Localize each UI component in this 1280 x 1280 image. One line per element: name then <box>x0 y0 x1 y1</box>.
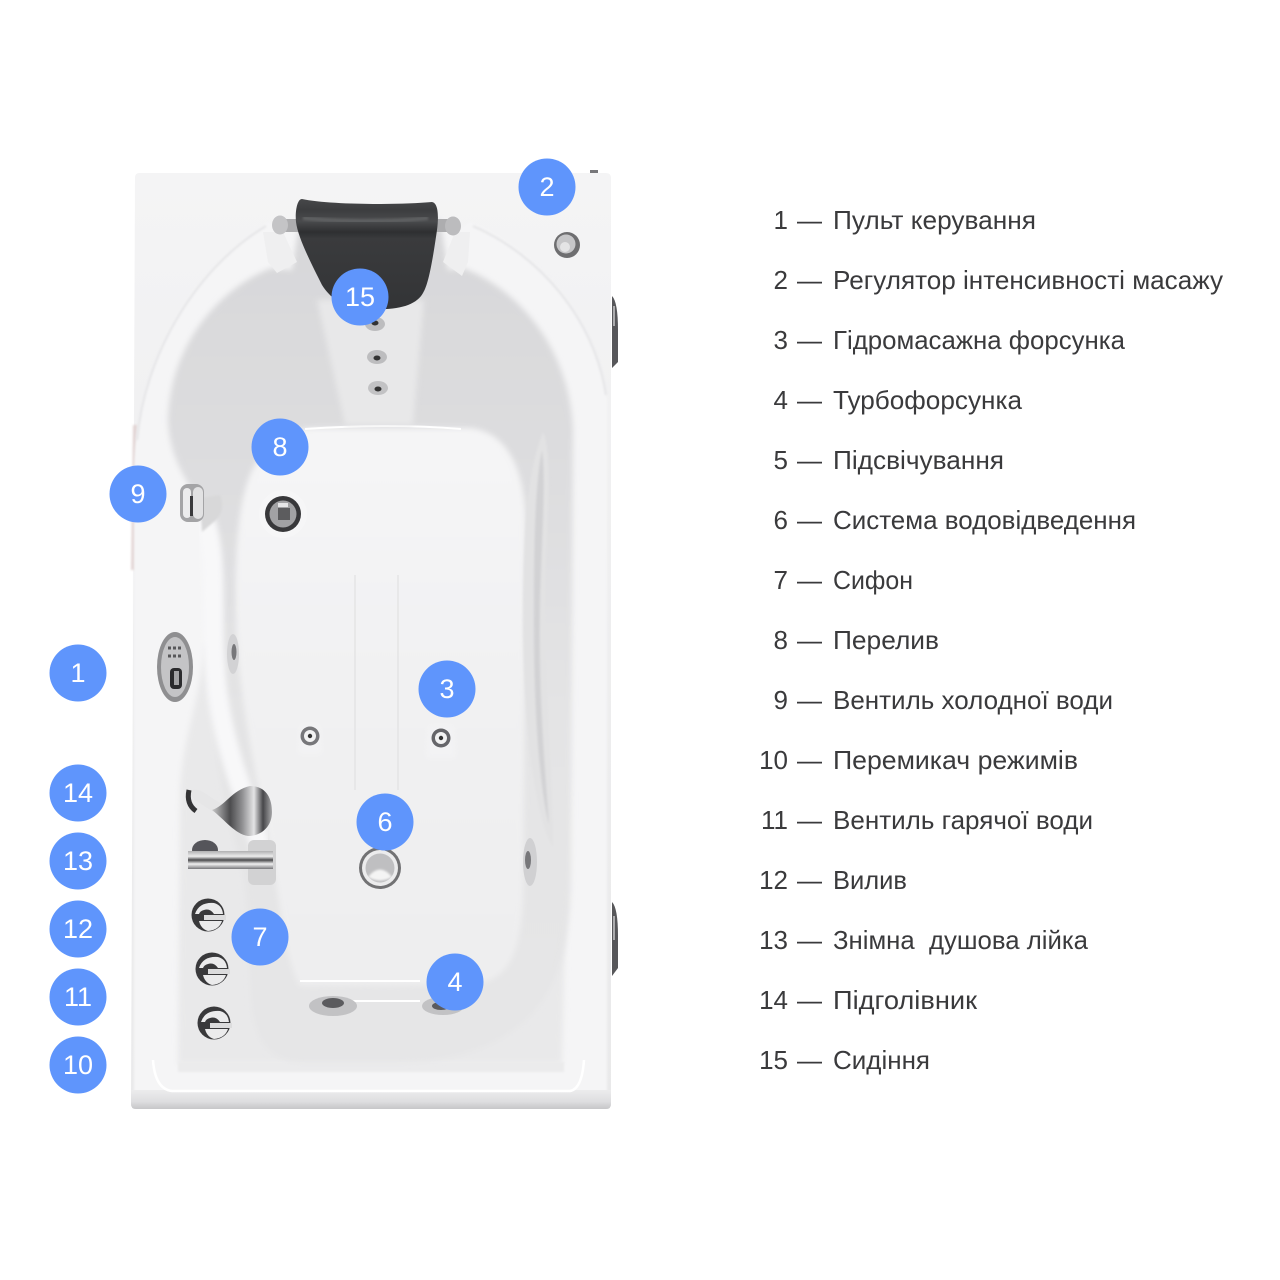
marker 15: 15 <box>345 282 375 312</box>
marker 14: 14 <box>63 778 93 808</box>
legend item 14: — <box>797 985 822 1015</box>
legend item 7: 7 <box>774 565 788 595</box>
legend <box>759 205 1223 1075</box>
upper right regulator <box>554 232 580 258</box>
headrest supports <box>263 232 470 276</box>
legend item 14 <box>759 985 978 1015</box>
legend item 15: Сидіння <box>833 1045 930 1075</box>
legend item 14: Підголівник <box>833 985 978 1015</box>
legend item 13: 13 <box>759 925 788 955</box>
legend item 4: 4 <box>774 385 788 415</box>
marker 11 <box>50 968 106 1026</box>
number markers <box>50 158 576 1094</box>
legend item 1: 1 <box>774 205 788 235</box>
legend item 8 <box>774 625 939 655</box>
control panel <box>157 632 193 702</box>
backrest panel <box>317 300 424 425</box>
tub body <box>131 173 611 1109</box>
valve knobs <box>192 898 232 1040</box>
headrest right bolt <box>445 216 461 236</box>
legend item 2: — <box>797 265 822 295</box>
legend item 11: Вентиль гарячої води <box>833 805 1093 835</box>
basin <box>168 220 573 1062</box>
legend item 9: 9 <box>774 685 788 715</box>
marker 1 <box>50 644 106 702</box>
legend item 12: 12 <box>759 865 788 895</box>
legend item 4: — <box>797 385 822 415</box>
legend item 15: — <box>797 1045 822 1075</box>
marker 2: 2 <box>539 172 555 202</box>
marker 1: 1 <box>70 658 86 688</box>
marker 8 <box>252 418 308 476</box>
marker 10: 10 <box>63 1050 93 1080</box>
legend item 1: — <box>797 205 822 235</box>
legend item 6: Система водовідведення <box>833 505 1136 535</box>
right side jet <box>523 838 537 886</box>
marker 9: 9 <box>130 479 146 509</box>
marker 7: 7 <box>252 922 268 952</box>
marker 13: 13 <box>63 846 93 876</box>
legend item 11: — <box>797 805 822 835</box>
marker 15 <box>332 268 388 326</box>
legend item 3: 3 <box>774 325 788 355</box>
legend item 10: Перемикач режимів <box>833 745 1078 775</box>
drain <box>359 847 401 889</box>
marker 3 <box>418 660 476 718</box>
basin floor <box>236 428 526 986</box>
shower head and hose <box>188 786 272 836</box>
legend item 14: 14 <box>759 985 788 1015</box>
lower basin ledge <box>178 1062 564 1072</box>
legend item 8: Перелив <box>833 625 939 655</box>
right armrest groove <box>523 432 553 847</box>
right armrest inner <box>534 450 549 825</box>
legend item 15: 15 <box>759 1045 788 1075</box>
marker 7 <box>232 908 288 966</box>
seat jets <box>298 724 456 758</box>
outer top fitting <box>590 170 598 173</box>
marker 12 <box>50 900 106 958</box>
marker 6: 6 <box>377 807 393 837</box>
bathtub top view <box>131 170 618 1109</box>
legend item 9: Вентиль холодної води <box>833 685 1113 715</box>
bottom rim <box>131 1090 611 1109</box>
legend item 11: 11 <box>761 805 788 835</box>
legend item 7: Сифон <box>833 565 913 595</box>
legend item 2: Регулятор інтенсивності масажу <box>833 265 1223 295</box>
legend item 1: Пульт керування <box>833 205 1036 235</box>
marker 12: 12 <box>63 914 93 944</box>
spout <box>188 840 276 885</box>
left side jet <box>227 634 239 674</box>
legend item 5: 5 <box>774 445 788 475</box>
marker 4 <box>426 954 484 1010</box>
faucet deck <box>178 640 566 1064</box>
legend item 10: 10 <box>759 745 788 775</box>
glossy rim band <box>134 222 607 1092</box>
legend item 7 <box>774 565 913 595</box>
marker 2 <box>518 158 576 216</box>
legend item 8: 8 <box>774 625 788 655</box>
back jets <box>365 317 388 395</box>
legend item 6: — <box>797 505 822 535</box>
legend item 12: Вилив <box>833 865 907 895</box>
rim highlights <box>153 1060 584 1091</box>
legend item 12: — <box>797 865 822 895</box>
outer right fittings <box>612 296 618 976</box>
legend item 5: Підсвічування <box>833 445 1004 475</box>
overflow <box>259 490 307 538</box>
legend item 8: — <box>797 625 822 655</box>
marker 8: 8 <box>272 432 288 462</box>
floor highlight lines <box>300 426 461 1001</box>
legend item 2: 2 <box>774 265 788 295</box>
marker 10 <box>50 1036 106 1094</box>
legend item 12 <box>759 865 907 895</box>
legend item 4: Турбофорсунка <box>833 385 1023 415</box>
legend item 13: — <box>797 925 822 955</box>
left edge tint <box>131 425 138 570</box>
marker 11: 11 <box>64 982 92 1012</box>
legend item 10: — <box>797 745 822 775</box>
left ledge curve <box>205 520 262 850</box>
legend item 3: — <box>797 325 822 355</box>
marker 9 <box>110 466 166 522</box>
marker 3: 3 <box>439 674 455 704</box>
headrest <box>296 199 438 309</box>
marker 6 <box>356 794 414 850</box>
marker 13 <box>50 832 106 890</box>
legend item 9: — <box>797 685 822 715</box>
floor channels <box>355 575 398 790</box>
legend item 6: 6 <box>774 505 788 535</box>
headrest connectors <box>284 219 448 232</box>
legend item 7: — <box>797 565 822 595</box>
shower head <box>212 786 272 836</box>
legend item 13: Знімна душова лійка <box>833 925 1089 955</box>
headrest seam <box>303 218 428 221</box>
turbo jets <box>309 996 464 1016</box>
right side jet core <box>525 851 531 869</box>
left side jet core <box>232 644 236 660</box>
rim outer contour <box>137 226 606 440</box>
headrest left bolt <box>272 216 288 234</box>
cold water valve <box>180 484 222 532</box>
marker 14 <box>50 764 106 822</box>
marker 4: 4 <box>447 967 463 997</box>
legend item 15 <box>759 1045 930 1075</box>
legend item 3: Гідромасажна форсунка <box>833 325 1126 355</box>
legend item 5: — <box>797 445 822 475</box>
